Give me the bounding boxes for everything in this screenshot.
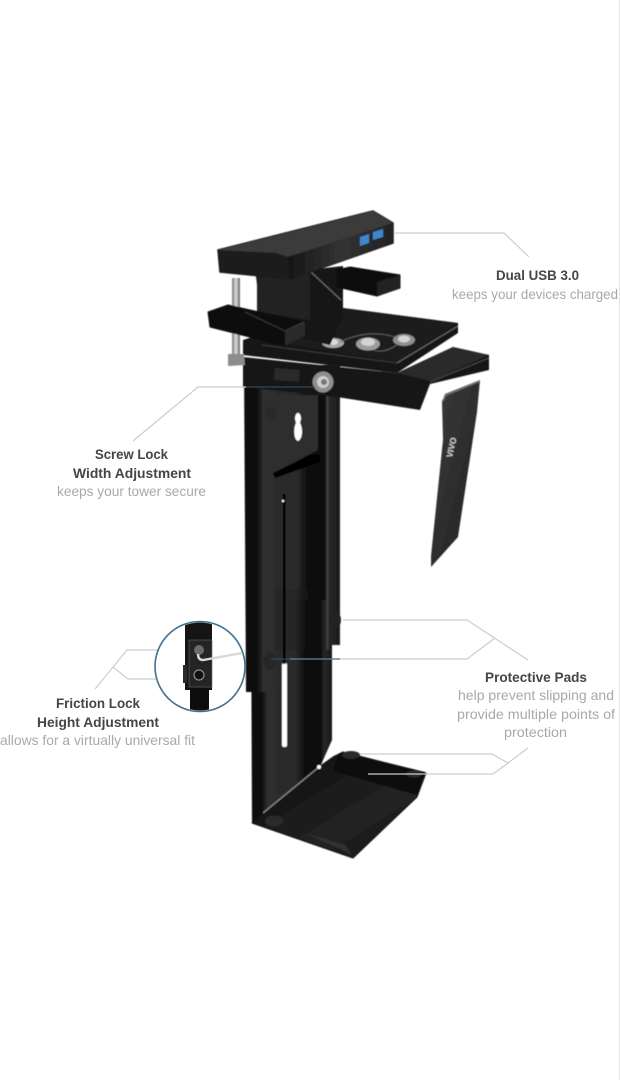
text: screw lock: Width Adjustment (73, 465, 191, 481)
callout lines: friction lock (95, 650, 185, 689)
text: friction lock: Height Adjustment (37, 714, 159, 730)
page edge line (619, 0, 620, 1080)
text: screw lock: Screw Lock (95, 446, 168, 462)
text: protective pads (457, 669, 615, 740)
text: screw lock: keeps your tower secure (57, 483, 206, 499)
text: friction lock (0, 695, 195, 748)
detail circle: friction lock (155, 620, 245, 713)
upper column (244, 365, 340, 692)
hanging flap (431, 380, 480, 567)
arm support (256, 266, 343, 345)
bolt: column pads (331, 612, 341, 628)
flap logo: VIVO (444, 436, 459, 458)
plate bolts (322, 338, 344, 348)
clamp bolt (232, 278, 240, 358)
thin slot (283, 494, 286, 664)
front clamp pad (208, 305, 304, 346)
text: protective pads: provide multiple points of (457, 706, 615, 722)
lower column (251, 590, 332, 823)
rear clamp pad (337, 267, 400, 296)
screw lock (312, 372, 334, 392)
text: dual USB (452, 267, 618, 302)
USB ports (360, 234, 369, 246)
text: friction lock: allows for a virtually universal fit (0, 732, 195, 748)
product: under-desk computer mount (208, 211, 489, 858)
callout lines: dual USB (395, 233, 529, 257)
text: screw lock (57, 446, 206, 499)
text: dual USB: Dual USB 3.0 (496, 267, 579, 283)
keyhole (294, 413, 302, 441)
callout lines: screw lock (133, 387, 315, 441)
text: protective pads: Protective Pads (485, 669, 587, 685)
lower bracket (243, 347, 489, 410)
mounting plate (243, 308, 458, 373)
callout lines: protective pads (271, 620, 528, 774)
height slot (282, 663, 287, 747)
text: friction lock: Friction Lock (56, 695, 140, 711)
text: protective pads: protection (504, 724, 567, 740)
text: protective pads: help prevent slipping and (458, 687, 614, 703)
top arm (218, 211, 393, 279)
base tray (252, 752, 426, 858)
